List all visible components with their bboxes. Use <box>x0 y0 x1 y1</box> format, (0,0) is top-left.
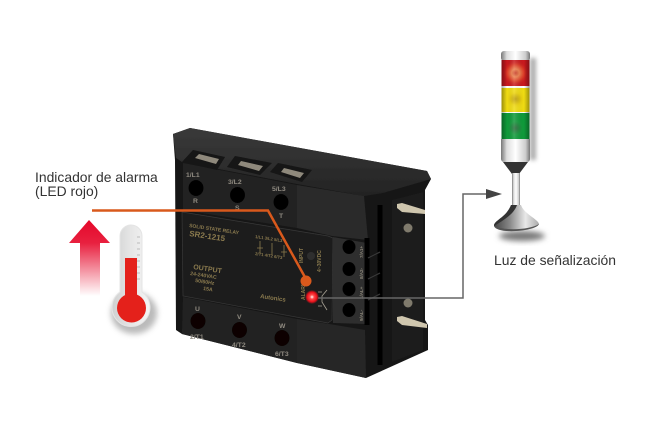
relay: top labels: R <box>193 198 198 205</box>
relay: panel text: 50/60Hz <box>195 278 215 287</box>
relay: panel text: 1/L1 3/L2 5/L3 <box>255 234 283 243</box>
relay: alarm symbol <box>318 290 327 310</box>
relay: silhouette <box>173 128 431 378</box>
relay: panel text: OUTPUT <box>193 264 223 275</box>
relay: top labels: S <box>235 205 240 212</box>
relay: panel text: 24-240VAC <box>190 271 217 281</box>
relay: bottom labels: V <box>237 314 242 321</box>
relay: upper right block <box>297 185 368 240</box>
relay: top labels: T <box>279 213 284 220</box>
relay: terminal slots <box>182 150 312 182</box>
tower: yellow light <box>502 88 530 112</box>
label: Indicador de alarma: Indicador de alarma <box>35 169 158 185</box>
relay: lower terminal strip <box>182 297 297 363</box>
relay: rivets <box>404 224 412 308</box>
relay: right bracket <box>392 192 423 362</box>
relay: control terminal block <box>333 237 367 324</box>
relay: top screw holes <box>188 180 288 210</box>
relay: side terminals <box>367 205 380 365</box>
relay: panel text: Autonics <box>260 294 287 304</box>
relay: top cap <box>173 128 431 196</box>
relay: main panel <box>182 212 333 323</box>
relay: schematic marks <box>257 241 287 257</box>
relay: bottom labels: 6/T3 <box>275 351 289 358</box>
connector: gray line from LED to signal light <box>318 189 502 298</box>
relay: panel text: ALARM <box>301 282 307 300</box>
relay: panel text: 2/T1 4/T2 6/T3 <box>255 251 283 260</box>
relay module <box>173 128 431 378</box>
relay: upper terminal strip <box>183 163 297 228</box>
relay: top labels: 3/L2 <box>228 179 242 186</box>
label: Luz de señalización: Luz de señalización <box>494 252 616 268</box>
relay: top labels: 1/L1 <box>186 172 200 179</box>
relay: top labels <box>186 172 286 220</box>
relay: bottom labels <box>190 306 289 358</box>
relay: terminal labels: 9/AL- <box>359 309 364 321</box>
relay: panel text: 4~30VDC <box>317 250 323 272</box>
tower: stem <box>512 173 520 207</box>
relay: bottom labels: U <box>195 306 200 313</box>
label: Indicador de alarma: (LED rojo) <box>35 183 98 199</box>
relay: terminal labels: 1/AL+ <box>359 286 364 299</box>
relay: bottom screw holes <box>190 313 290 346</box>
tower: base <box>494 205 539 231</box>
relay: panel text: INPUT <box>299 248 305 263</box>
relay: lower right block <box>297 319 366 378</box>
relay: bottom labels: 4/T2 <box>232 342 246 349</box>
relay: terminal labels: 8/A2- <box>359 267 364 279</box>
LED: red alarm <box>305 290 319 304</box>
relay: input window <box>307 252 315 260</box>
relay: top labels: 5/L3 <box>272 186 286 193</box>
relay: mounting clip top <box>397 203 425 214</box>
icon: thermometer <box>111 225 157 334</box>
relay: terminal labels: 7/A1+ <box>359 245 364 258</box>
icon: rising temperature arrow <box>69 220 110 296</box>
relay: panel text: SR2-1215 <box>189 229 226 243</box>
tower: top cap <box>501 51 530 61</box>
relay: panel text: SOLID STATE RELAY <box>189 223 240 236</box>
tower: cone <box>503 162 528 174</box>
relay: panel text <box>189 223 323 304</box>
relay: bottom labels: 2/T1 <box>190 334 204 341</box>
tower: lens shading <box>502 60 530 139</box>
relay: panel text: 15A <box>203 286 213 293</box>
relay: terminal labels <box>359 245 364 321</box>
connector: orange line from label to alarm <box>92 210 312 286</box>
tower: white section <box>501 139 530 162</box>
tower: red light <box>502 60 530 86</box>
relay: control terminal holes <box>342 240 356 317</box>
relay: mounting clip bottom <box>397 316 427 328</box>
tower: green light <box>502 113 530 139</box>
relay: bottom labels: W <box>279 323 286 330</box>
icon: signal tower light <box>494 51 545 241</box>
